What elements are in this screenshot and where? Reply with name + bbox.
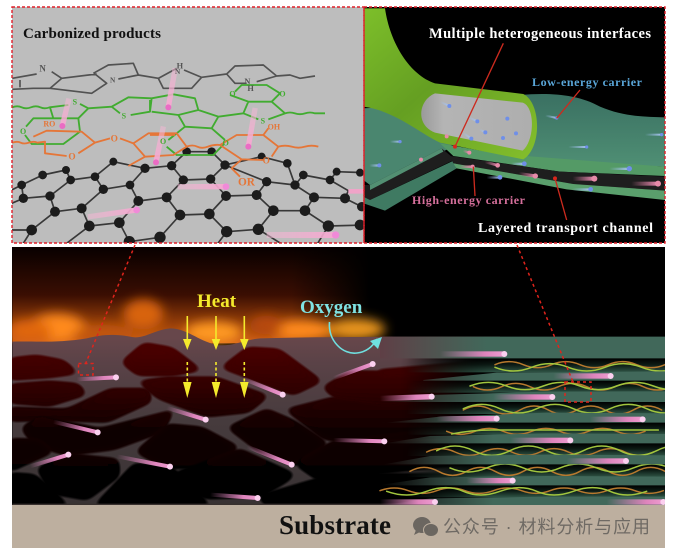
heat arrows	[183, 316, 249, 398]
leader lines	[453, 43, 580, 220]
heading: carbonized products: Carbonized products	[23, 26, 161, 42]
atom labels: OH	[268, 122, 281, 131]
panel: carbonized products	[12, 7, 366, 247]
atom labels: N	[110, 76, 116, 85]
label: high-energy carrier: High-energy carrier	[412, 193, 526, 207]
watermark text: 公众号 · 材料分析与应用	[443, 517, 650, 537]
zoom callout: carbonized area	[78, 245, 135, 375]
atom labels: H	[177, 62, 184, 71]
substrate bar	[12, 505, 665, 548]
atom labels: H	[247, 84, 254, 93]
panel: main cross-section	[7, 247, 673, 508]
green polymer chain	[12, 85, 325, 155]
panel borders	[12, 7, 665, 243]
atom labels: S	[73, 98, 78, 107]
grey polymer chain	[12, 63, 315, 93]
label: layered transport channel: Layered transport channel	[478, 221, 653, 236]
atom labels: O	[160, 137, 166, 146]
atom labels	[20, 62, 286, 188]
layered region on the right	[380, 337, 673, 507]
atom labels: O	[223, 138, 229, 147]
graphene sheet	[12, 147, 366, 247]
left plate stack	[363, 107, 457, 211]
charge carriers in layers	[380, 351, 666, 505]
atom labels: N	[244, 77, 250, 86]
dark gap fade	[408, 358, 505, 505]
atom labels: S	[261, 116, 266, 125]
tube cross section	[421, 93, 532, 151]
atom labels: O	[20, 127, 26, 136]
orange polymer chain	[12, 128, 318, 177]
panel background	[364, 7, 665, 243]
substrate label: Substrate	[279, 510, 391, 540]
label: heat: Heat	[197, 291, 237, 312]
dark green shading between plates	[400, 358, 667, 497]
right layered bands	[440, 143, 665, 200]
atom labels: O	[68, 152, 76, 162]
pink charge carriers	[59, 68, 365, 239]
charge carriers in network	[29, 361, 387, 501]
label: oxygen: Oxygen	[300, 297, 363, 318]
atom labels: RO	[43, 120, 55, 129]
panel background	[12, 7, 364, 243]
icon: chat watermark	[413, 517, 438, 536]
atom labels: N	[39, 63, 46, 73]
flames	[7, 247, 512, 508]
atom labels: O	[263, 156, 270, 166]
porous network surface	[12, 328, 500, 508]
transport channel illustration	[363, 8, 665, 220]
molecular diagram	[12, 62, 366, 247]
mesh cells	[7, 340, 507, 508]
atom labels: O	[111, 134, 118, 144]
atom labels: OR	[238, 176, 256, 188]
substrate	[12, 505, 665, 548]
oxygen arrow	[329, 322, 382, 353]
atom labels: N	[175, 67, 181, 76]
atom labels: O	[229, 90, 236, 99]
black base	[12, 247, 665, 474]
green plates	[380, 337, 665, 506]
lower edge line	[12, 504, 446, 505]
panel: layered transport channel	[363, 7, 665, 243]
label: low-energy carrier: Low-energy carrier	[532, 75, 643, 89]
right upper sheet	[517, 94, 665, 167]
label: multiple heterogeneous interfaces: Multiple heterogeneous interfaces	[429, 26, 651, 42]
carriers	[369, 101, 663, 192]
green tube	[363, 8, 537, 159]
zoom callout: layered area	[517, 245, 591, 402]
woven fibres	[380, 362, 673, 495]
atom labels: S	[122, 112, 127, 121]
atom labels: O	[279, 90, 286, 99]
